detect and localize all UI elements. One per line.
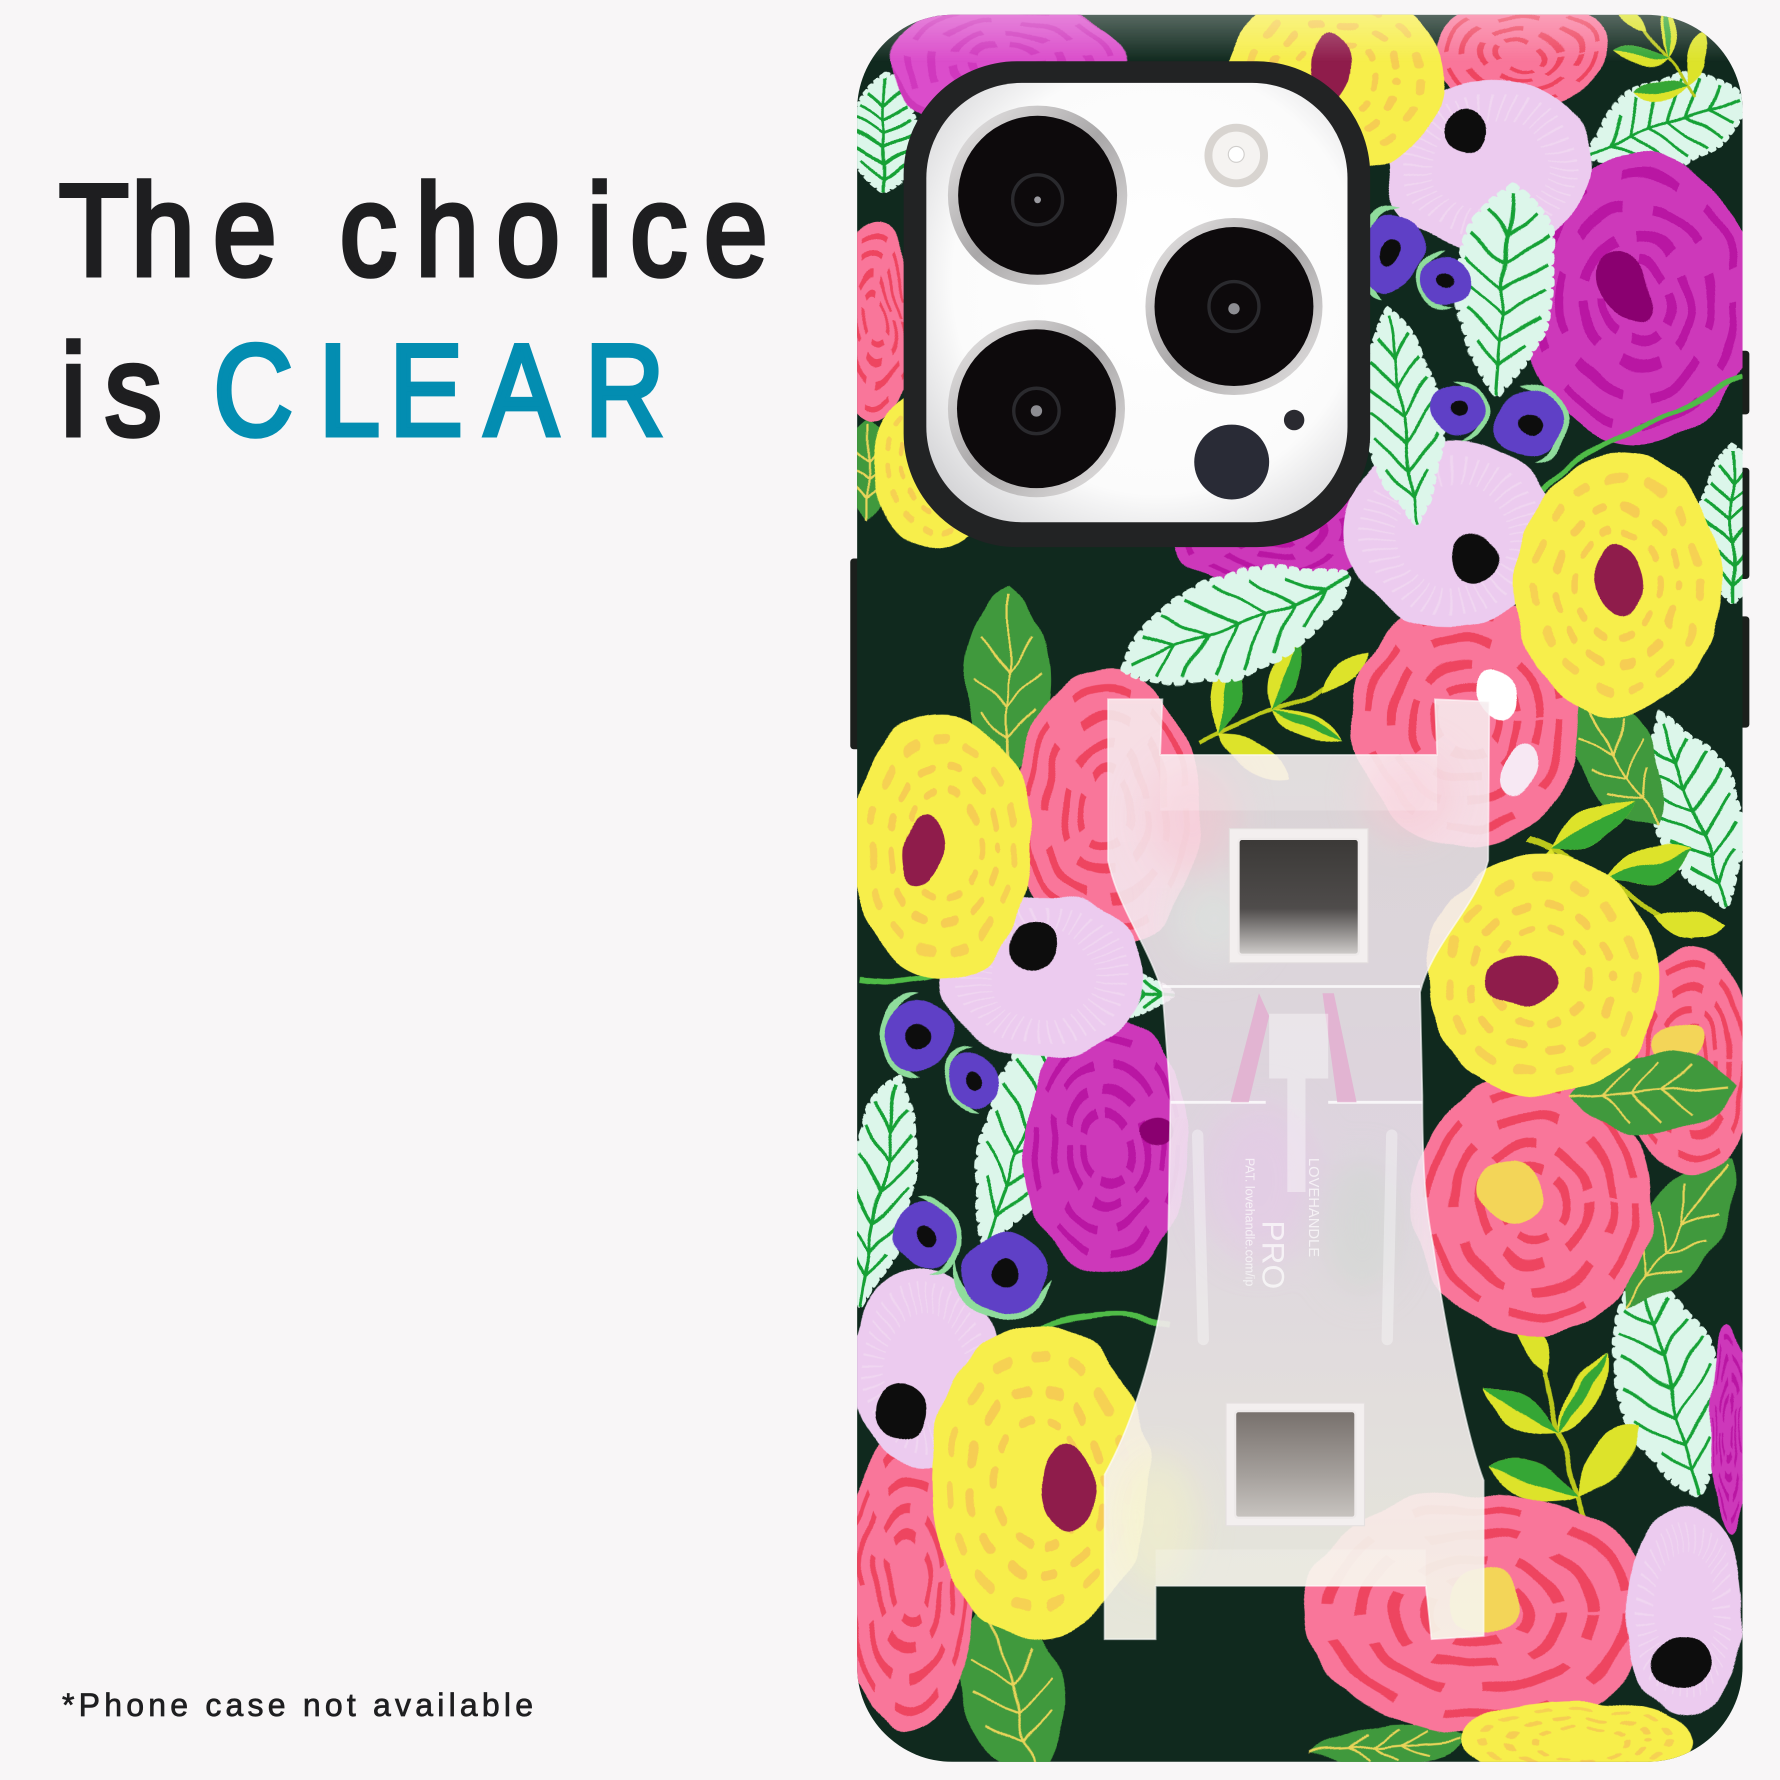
- vines: [857, 375, 1743, 1368]
- side buttons: [850, 351, 1749, 749]
- lidar sensor: [1194, 425, 1269, 499]
- embossed text: [1242, 1158, 1321, 1289]
- title line 1: The choice: [59, 157, 768, 303]
- green leaves: [842, 417, 1760, 1780]
- flash: [1204, 124, 1268, 187]
- lilac anemones: [850, 78, 1745, 1716]
- title line 2: is: [61, 317, 162, 463]
- floral pattern: [828, 0, 1770, 1780]
- lens: ultra wide: [948, 320, 1125, 497]
- embossed text: PRO: [1255, 1220, 1291, 1289]
- green leaf over rose: [1568, 1050, 1738, 1136]
- pink roses: [833, 0, 1755, 1732]
- microphone: [1284, 410, 1304, 430]
- embossed text: PAT. lovehandle.com/ip: [1242, 1158, 1256, 1286]
- hinge cut-outs: [1231, 993, 1357, 1102]
- blue berries: [873, 193, 1566, 1333]
- leaf sprigs: [1171, 0, 1758, 1538]
- magenta roses: [889, 2, 1753, 1535]
- white leaves: [828, 51, 1770, 1513]
- white leaves over anemones: [1101, 181, 1561, 714]
- footnote: *Phone case not available: [62, 1687, 533, 1723]
- frosted tints: [1119, 749, 1453, 1589]
- phone case body with floral pattern: [828, 0, 1770, 1780]
- title word: CLEAR: CLEAR: [213, 318, 665, 463]
- phone case illustration: [850, 14, 1750, 1762]
- yellow flowers: [852, 0, 1721, 1780]
- embossed text: LOVEHANDLE: [1305, 1158, 1321, 1257]
- camera module: [904, 61, 1370, 547]
- translucent magnetic clip: [1105, 699, 1489, 1639]
- top magnet: [1229, 829, 1368, 963]
- bottom magnet: [1226, 1403, 1365, 1526]
- lens: main: [948, 106, 1127, 285]
- lens: telephoto: [1145, 218, 1323, 395]
